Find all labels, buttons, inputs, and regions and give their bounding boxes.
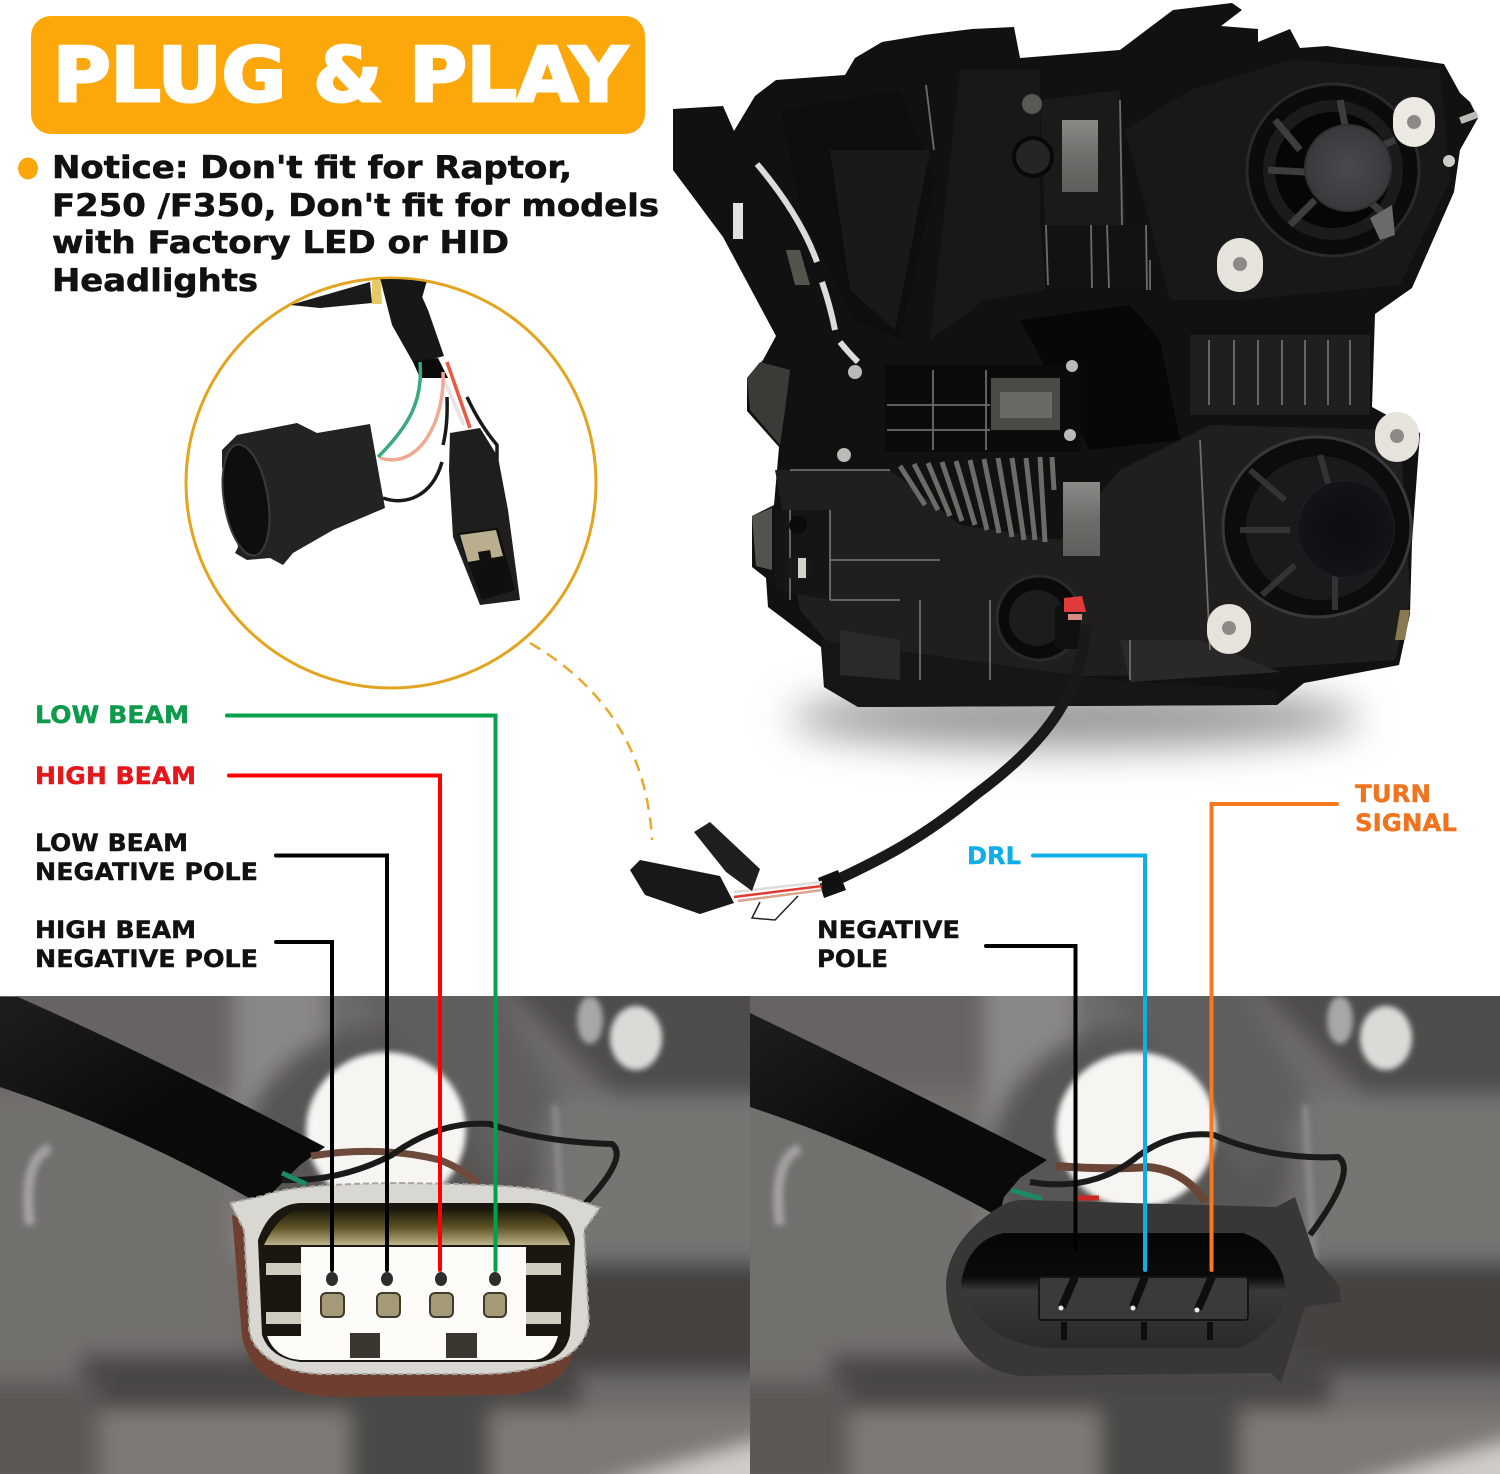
label: low beam negative pole: [35, 829, 258, 886]
label: high beam: HIGH BEAM: [35, 762, 196, 790]
wires: [1011, 1134, 1344, 1235]
connector cavity: [961, 1233, 1286, 1348]
pin glints: [1058, 1306, 1200, 1312]
label: turn signal: TURN: [1355, 780, 1431, 808]
terminal plate: [1039, 1277, 1248, 1320]
tab and small details: [733, 94, 1410, 640]
large connector: [216, 423, 385, 565]
label: negative pole: NEGATIVE: [817, 916, 960, 944]
label: low beam negative pole: NEGATIVE POLE: [35, 858, 258, 886]
harness cable and connector: [630, 625, 1086, 920]
light strip: [757, 164, 858, 362]
label: turn signal: [1355, 780, 1457, 837]
notice text block: Headlights: [52, 263, 258, 299]
title badge: PLUG & PLAY: [31, 16, 645, 134]
olive band: [264, 1210, 570, 1245]
body panels and ridges: [747, 60, 1450, 707]
terminals: [321, 1293, 506, 1317]
headlight assembly rear view: [673, 3, 1478, 707]
lower projector lens: [1223, 437, 1411, 617]
mounting bolts: [1207, 97, 1478, 654]
label: negative pole: [817, 916, 960, 973]
slots: [350, 1333, 477, 1358]
bulb socket and plug: [997, 576, 1086, 660]
label: low beam: LOW BEAM: [35, 701, 189, 729]
brown backing: [232, 1215, 589, 1397]
wires: [282, 1124, 617, 1210]
notice text block: Notice: Don't fit for Raptor,: [52, 150, 572, 186]
label: high beam negative pole: HIGH BEAM: [35, 916, 196, 944]
detail circle: connector close-up: [186, 270, 596, 688]
silver rim: [230, 1183, 600, 1374]
fin fan: [900, 457, 1054, 542]
ridge highlights: [790, 85, 1350, 680]
wiring callout lines: [227, 716, 1337, 1270]
left connector photo: [0, 996, 750, 1474]
label: high beam negative pole: NEGATIVE POLE: [35, 945, 258, 973]
white block: [267, 1247, 558, 1360]
label: negative pole: POLE: [817, 945, 888, 973]
notice text block: F250 /F350, Don't fit for models: [52, 188, 659, 224]
cable: [0, 997, 325, 1203]
wires: [378, 362, 497, 501]
connector body: [946, 1197, 1341, 1383]
holes: [326, 1272, 501, 1286]
headlight shadow: [790, 688, 1360, 748]
label: DRL: DRL: [967, 842, 1021, 870]
small connector: [449, 428, 520, 605]
label plate upper: [1062, 120, 1098, 192]
title badge: PLUG & PLAY: PLUG & PLAY: [53, 31, 629, 119]
label: high beam negative pole: [35, 916, 258, 973]
notice text block: with Factory LED or HID: [52, 225, 509, 261]
interior: [258, 1203, 575, 1362]
notice text block: [18, 150, 659, 299]
dashed leader line: [530, 643, 652, 840]
pins: [1062, 1277, 1212, 1340]
label: turn signal: SIGNAL: [1355, 809, 1457, 837]
upper projector lens: [1247, 84, 1419, 256]
cable: [750, 1013, 1047, 1217]
top clipped hardware: [290, 270, 448, 378]
side pins: [266, 1263, 561, 1324]
label plate lower: [1063, 482, 1100, 556]
label: low beam negative pole: LOW BEAM: [35, 829, 188, 857]
right connector photo: [750, 996, 1500, 1474]
